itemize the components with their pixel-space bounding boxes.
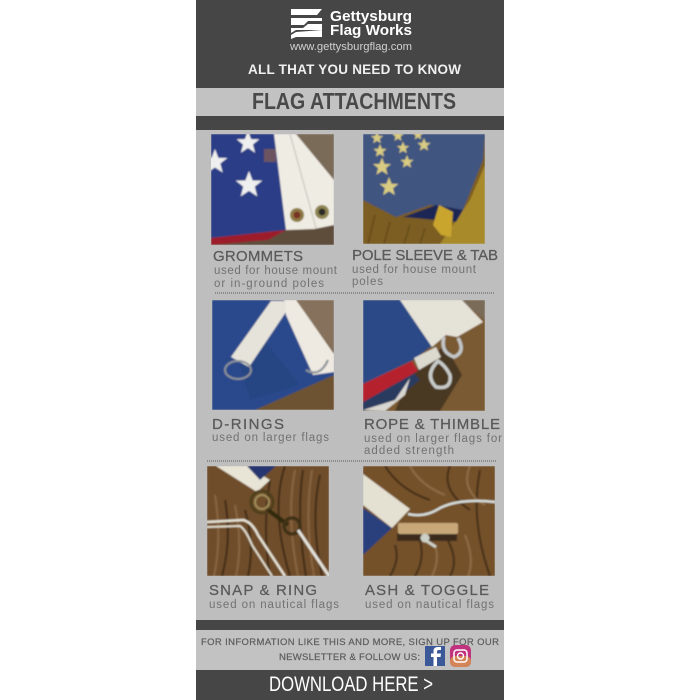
- panel: grommets: [203, 131, 338, 290]
- description: pole sleeve and tab: poles: [352, 276, 383, 288]
- description: pole sleeve and tab: used for house mount: [352, 264, 477, 276]
- photo: pole sleeve and tab: [363, 130, 485, 244]
- newsletter text: FOR INFORMATION LIKE THIS AND MORE, SIGN UP FOR OUR: [201, 637, 499, 648]
- panel: ash and toggle: [363, 466, 495, 611]
- page background: [196, 0, 504, 700]
- description: pole sleeve and tab: [352, 264, 477, 288]
- panel: rope and thimble: [363, 300, 502, 457]
- photo: ash and toggle: [363, 466, 495, 576]
- download label: DOWNLOAD HERE >: [269, 673, 433, 696]
- heading: d-rings: D-RINGS: [212, 416, 284, 433]
- icon: facebook: [425, 646, 445, 666]
- divider: [215, 292, 494, 294]
- title: FLAG ATTACHMENTS: [252, 88, 456, 114]
- icon: instagram: [450, 645, 471, 667]
- call to action: download: [196, 670, 504, 700]
- description: grommets: or in-ground poles: [214, 278, 324, 290]
- photo: snap and ring: [207, 466, 329, 576]
- description: ash and toggle: used on nautical flags: [365, 599, 494, 611]
- panel: snap and ring: [207, 466, 339, 611]
- description: rope and thimble: [364, 433, 502, 457]
- website url: www.gettysburgflag.com: [289, 41, 412, 53]
- logo wordmark: Flag Works: [330, 22, 412, 39]
- heading: snap and ring: SNAP & RING: [209, 582, 317, 599]
- logo wordmark: Gettysburg: [330, 8, 412, 25]
- photo: grommets: [203, 131, 334, 245]
- heading: pole sleeve and tab: POLE SLEEVE & TAB: [352, 247, 498, 264]
- title band: [196, 88, 504, 130]
- header panel: [196, 0, 504, 88]
- photo: d-rings: [212, 300, 334, 410]
- description: grommets: [214, 265, 338, 290]
- description: rope and thimble: used on larger flags for: [364, 433, 502, 445]
- photo: rope and thimble: [363, 300, 485, 411]
- heading: grommets: GROMMETS: [213, 248, 303, 265]
- description: snap and ring: used on nautical flags: [209, 599, 339, 611]
- heading: ash and toggle: ASH & TOGGLE: [365, 582, 489, 599]
- subtitle: ALL THAT YOU NEED TO KNOW: [248, 62, 461, 77]
- newsletter text: [201, 637, 499, 663]
- footer panel: newsletter: [196, 620, 504, 670]
- logo icon: [291, 9, 322, 39]
- panel: pole sleeve and tab: [352, 130, 498, 288]
- panel: d-rings: [212, 300, 334, 444]
- description: d-rings: used on larger flags: [212, 432, 329, 444]
- divider: [207, 460, 496, 462]
- heading: rope and thimble: ROPE & THIMBLE: [364, 416, 500, 433]
- description: rope and thimble: added strength: [364, 445, 454, 457]
- description: grommets: used for house mount: [214, 265, 338, 277]
- logo wordmark: [330, 8, 412, 39]
- newsletter text: NEWSLETTER & FOLLOW US:: [279, 652, 420, 663]
